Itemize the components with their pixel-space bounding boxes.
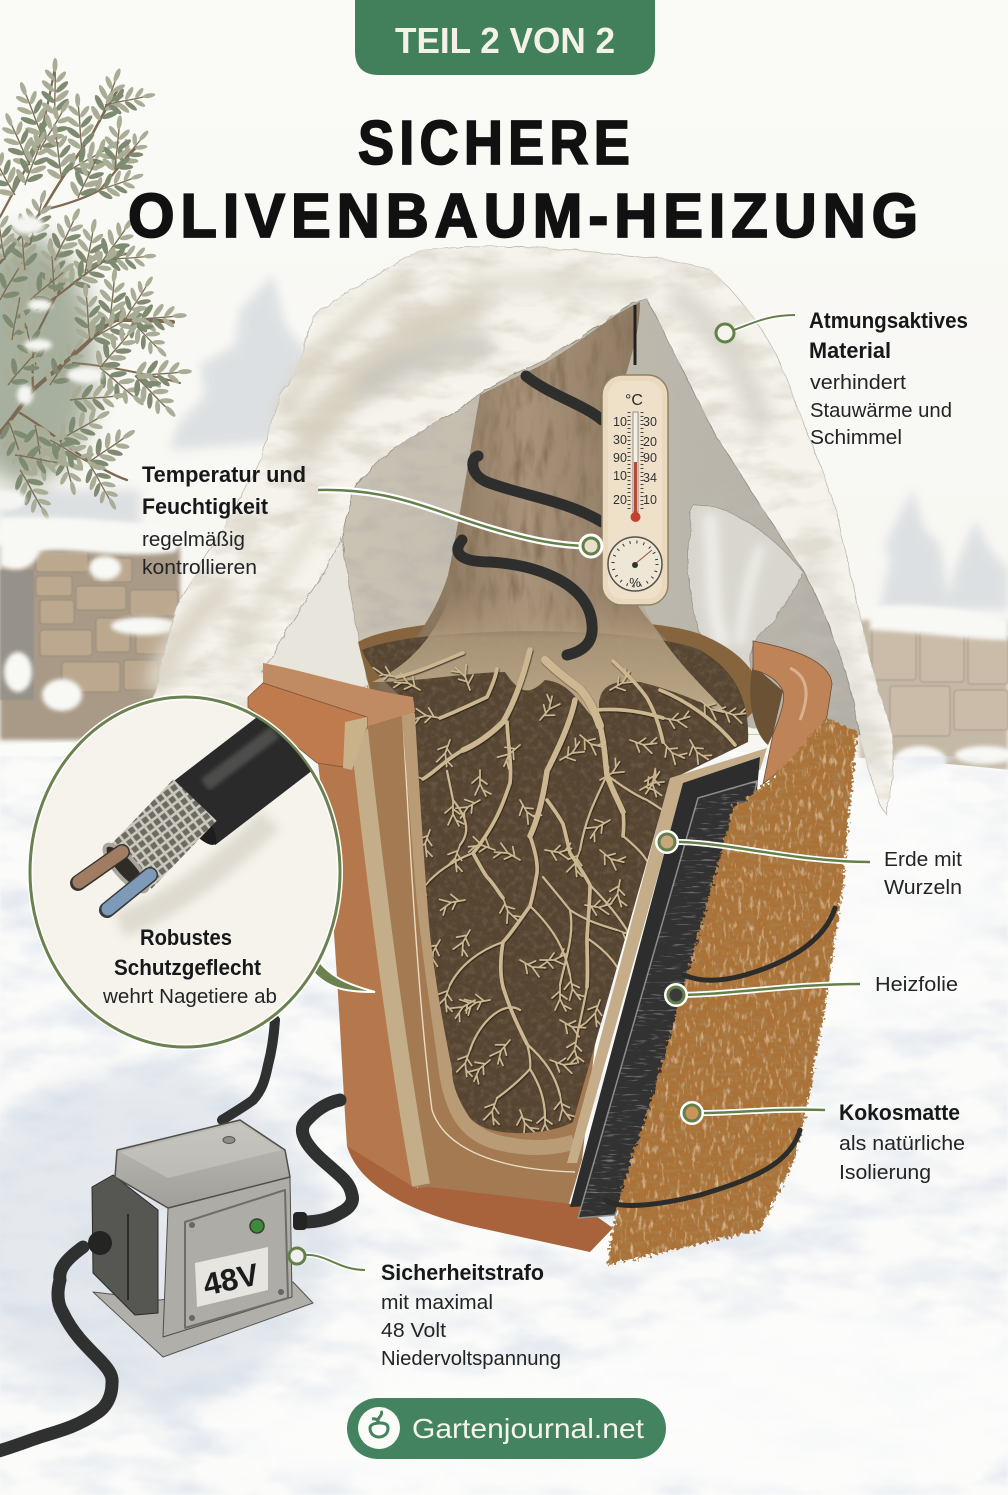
title: OLIVENBAUM-HEIZUNG <box>128 182 924 251</box>
heating foil <box>578 781 757 1218</box>
transformer cables <box>0 1020 352 1452</box>
bubble text: Robustes <box>140 925 232 950</box>
right inner hanging fold <box>689 504 803 712</box>
bubble tail <box>314 957 375 992</box>
heating cable around trunk <box>458 376 602 655</box>
bubble circle <box>30 697 340 1047</box>
pot base band <box>347 1146 613 1252</box>
thermometer: 20 <box>613 493 627 507</box>
cables over mat <box>605 908 835 1205</box>
logo icon <box>358 1407 400 1449</box>
label: Atmungsaktives Material: verhindert <box>810 371 906 394</box>
pot middle layer <box>368 697 600 1207</box>
title <box>128 109 924 251</box>
thermometer: 30 <box>643 415 657 429</box>
label: Sicherheitstrafo: 48 Volt <box>381 1319 446 1342</box>
pot body outer <box>262 700 420 1198</box>
title: SICHERE <box>358 109 635 178</box>
humidity gauge <box>608 537 662 591</box>
snowy ground <box>0 741 1008 1495</box>
fleece cover <box>148 246 893 815</box>
label: Sicherheitstrafo: mit maximal <box>381 1291 493 1314</box>
thermometer: °C <box>625 392 643 409</box>
label: Sicherheitstrafo: Sicherheitstrafo <box>381 1260 544 1285</box>
root flare at trunk base <box>372 590 730 728</box>
top tab: Teil 2 von 2: TEIL 2 VON 2 <box>395 20 615 61</box>
lid <box>115 1120 290 1208</box>
label: Kokosmatte: Kokosmatte <box>839 1100 960 1125</box>
thermometer: 10 <box>613 469 627 483</box>
pot inner tan band <box>408 700 574 1147</box>
olive tree branches <box>0 58 193 527</box>
leader line: Temperatur <box>318 490 601 556</box>
thermometer: 90 <box>613 451 627 465</box>
tan layer right <box>567 748 767 1163</box>
thermometer: 30 <box>613 433 627 447</box>
pot cross-section with soil and roots <box>248 590 748 1252</box>
tree trunk <box>360 302 730 700</box>
fleece inner opening <box>343 299 860 735</box>
label: Atmungsaktives Material <box>809 308 968 449</box>
leader line: Erde <box>657 832 870 862</box>
label: Temperatur und Feuchtigkeit: kontrollieren <box>142 556 257 579</box>
magnifier bubble: Schutzgeflecht <box>30 697 375 1047</box>
thermometer: 10 <box>643 493 657 507</box>
rim tan cut end <box>343 717 367 770</box>
label: Temperatur und Feuchtigkeit: Feuchtigkeit <box>142 494 269 519</box>
black insulation layer <box>570 757 760 1207</box>
top tab: Teil 2 von 2 <box>355 0 655 75</box>
left garden wall <box>0 517 190 740</box>
label: Temperatur und Feuchtigkeit: Temperatur und <box>142 462 306 487</box>
label: Sicherheitstrafo <box>381 1260 561 1370</box>
label: Erde mit Wurzeln <box>884 848 962 899</box>
bubble text: Schutzgeflecht <box>114 955 262 980</box>
label: Sicherheitstrafo: Niedervoltspannung <box>381 1347 561 1370</box>
pot left rim top face <box>263 663 415 726</box>
thermometer: % <box>629 575 641 590</box>
label: Atmungsaktives Material: Stauwärme und <box>810 399 952 422</box>
base plate <box>93 1282 313 1357</box>
label: Erde mit Wurzeln: Wurzeln <box>884 876 962 899</box>
pot right rim <box>750 641 832 784</box>
bubble text <box>102 925 277 1008</box>
footer badge: Gartenjournal.net <box>347 1398 666 1459</box>
roots <box>369 650 748 1137</box>
thermometer <box>602 305 668 605</box>
misty background trees <box>0 275 1008 610</box>
leader line: Kokosmatte <box>682 1103 825 1123</box>
coconut mat <box>607 718 857 1265</box>
right garden wall <box>860 605 1008 774</box>
fleece outer shape <box>148 246 893 815</box>
label: Temperatur und Feuchtigkeit <box>142 462 306 579</box>
bubble text: wehrt Nagetiere ab <box>102 985 277 1008</box>
label: Atmungsaktives Material: Material <box>809 338 891 363</box>
label: Kokosmatte <box>839 1100 965 1184</box>
48V label <box>195 1247 268 1307</box>
label: Atmungsaktives Material: Schimmel <box>810 426 902 449</box>
footer badge: Gartenjournal.net: Gartenjournal.net <box>412 1413 644 1444</box>
soil <box>362 631 748 1133</box>
pot left rim cap <box>248 683 367 768</box>
pot outer tan strip <box>359 730 421 1185</box>
label: Heizfolie: Heizfolie <box>875 973 958 996</box>
thermometer: 10 <box>613 415 627 429</box>
thermometer: 20 <box>643 435 657 449</box>
thermometer: 34 <box>643 471 657 485</box>
leader line: Atmungsaktives Material <box>716 315 795 342</box>
label: Temperatur und Feuchtigkeit: regelmäßig <box>142 528 245 551</box>
label: Kokosmatte: Isolierung <box>839 1161 931 1184</box>
label: Erde mit Wurzeln: Erde mit <box>884 848 962 871</box>
transformer 48V box: 48V <box>200 1257 262 1302</box>
fleece fold shading <box>158 283 878 770</box>
dark side housing <box>92 1175 158 1315</box>
left inner white fold <box>262 538 369 690</box>
thermometer: 90 <box>643 451 657 465</box>
pot back rim <box>358 618 765 720</box>
cable cross-section <box>78 732 300 925</box>
LED <box>250 1219 264 1233</box>
label: Kokosmatte: als natürliche <box>839 1132 965 1155</box>
leader line: Heizfolie <box>666 984 860 1005</box>
front panel <box>163 1177 292 1337</box>
transformer 48V box <box>88 1120 313 1357</box>
label: Atmungsaktives Material: Atmungsaktives <box>809 308 968 333</box>
leader line: Sicherheitstrafo <box>289 1248 365 1270</box>
thermometer body <box>602 375 668 605</box>
